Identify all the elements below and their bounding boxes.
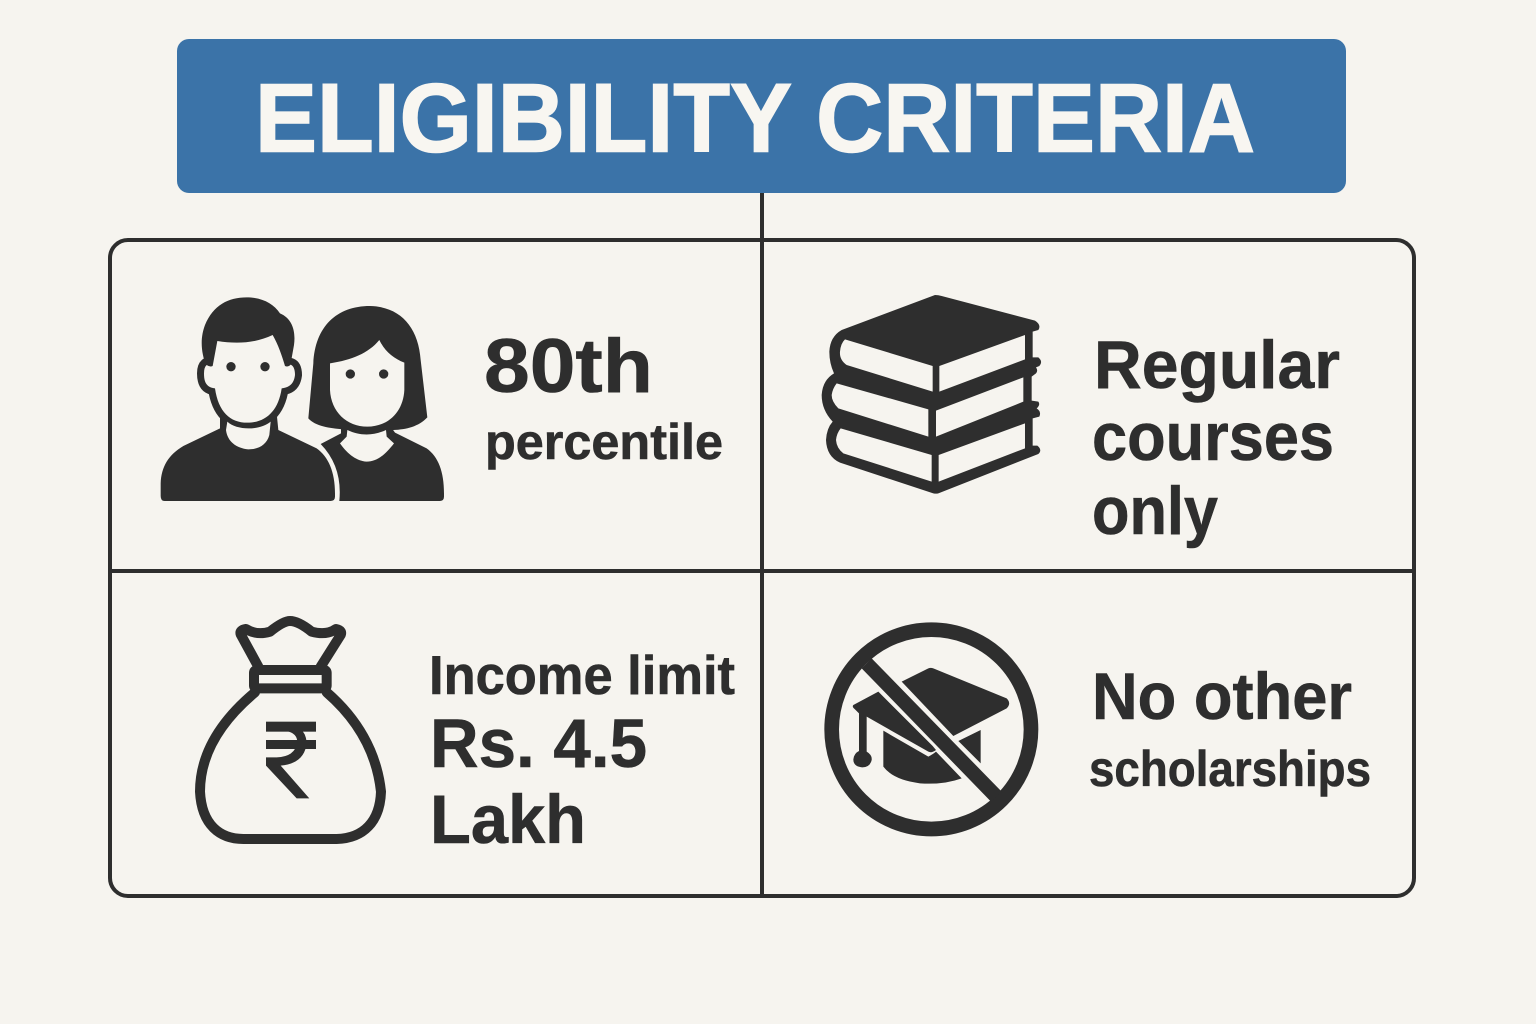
connector from banner to grid	[760, 193, 764, 240]
text: regular courses only: only	[1092, 473, 1218, 549]
icon: stack of books	[822, 295, 1041, 494]
text: no other scholarships: scholarships	[1089, 741, 1371, 797]
panel: income limit	[112, 573, 762, 894]
panel: no other scholarships	[762, 573, 1412, 894]
text: 80th percentile	[484, 324, 723, 470]
text: income limit Rs. 4.5 Lakh	[429, 644, 735, 858]
text: regular courses only: courses	[1092, 399, 1334, 475]
panel: percentile	[112, 242, 762, 571]
icon: crossed-out graduation cap	[832, 630, 1031, 829]
title banner	[177, 39, 1346, 193]
criteria grid frame	[110, 240, 1414, 896]
text: income limit Rs. 4.5 Lakh: Income limit	[429, 644, 735, 706]
text: regular courses only: Regular	[1094, 327, 1340, 403]
text: 80th percentile: 80th	[484, 324, 653, 409]
title: ELIGIBILITY CRITERIA	[255, 64, 1255, 172]
text: income limit Rs. 4.5 Lakh: Lakh	[430, 781, 586, 858]
text: no other scholarships	[1089, 659, 1371, 797]
text: no other scholarships: No other	[1092, 659, 1352, 733]
panel: regular courses	[762, 242, 1412, 571]
text: regular courses only	[1092, 327, 1340, 549]
icon: rupee money bag	[200, 621, 381, 839]
text: income limit Rs. 4.5 Lakh: Rs. 4.5	[430, 705, 647, 782]
text: 80th percentile: percentile	[485, 414, 723, 470]
icon: man and woman	[161, 297, 444, 501]
icon: rupee sign	[266, 722, 316, 798]
